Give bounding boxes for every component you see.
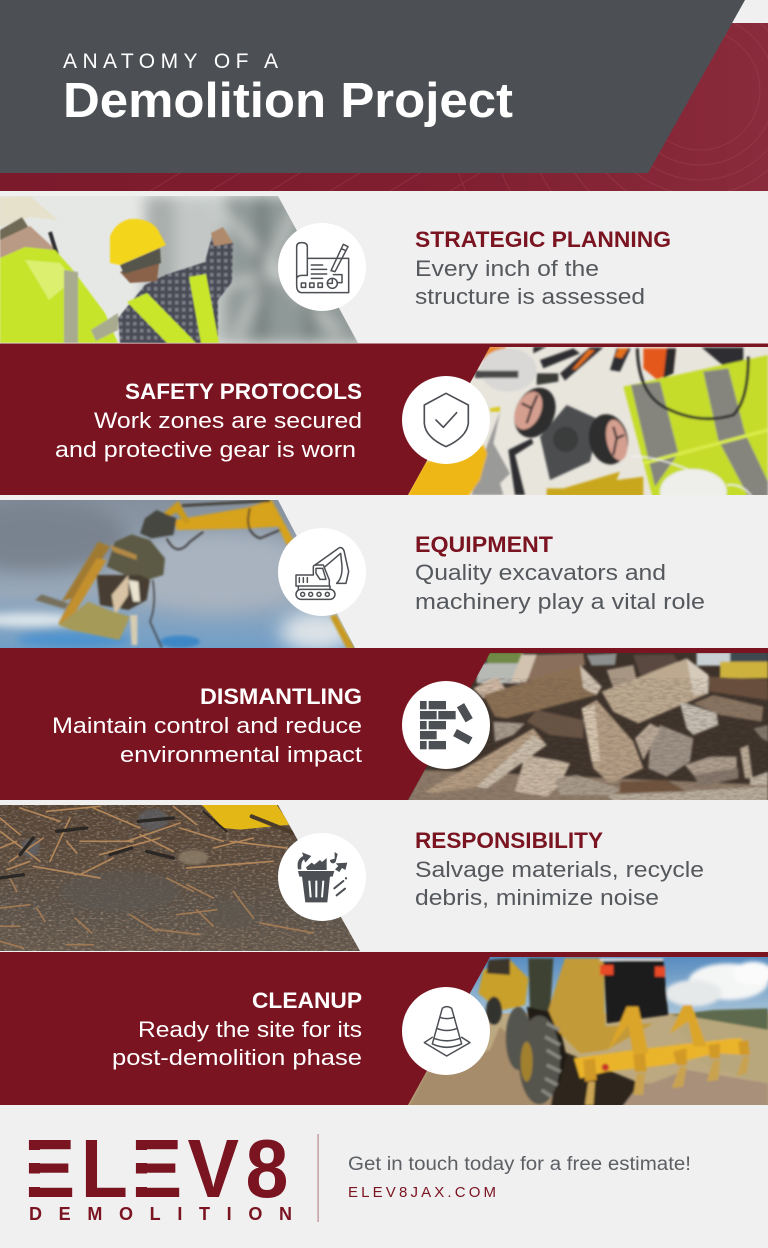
text: dismantling: Maintain control and reduce [52, 713, 362, 738]
text: dismantling [52, 684, 363, 767]
text: responsibility [415, 828, 704, 910]
tires [506, 1007, 531, 1070]
text: dismantling: environmental impact [120, 742, 363, 767]
photo: excavator arm and sky [0, 500, 355, 648]
header band: textured red [0, 23, 768, 191]
icon: blueprint and pencil [278, 223, 366, 311]
text: strategic planning: structure is assessed [415, 284, 645, 309]
title [63, 50, 513, 128]
text: strategic planning: STRATEGIC PLANNING [415, 227, 671, 252]
text: equipment: Quality excavators and [415, 560, 666, 585]
photo: wood debris [0, 805, 360, 951]
icon: shield with check [402, 376, 490, 464]
text: strategic planning [415, 227, 671, 309]
text: safety protocols: and protective gear is worn [55, 437, 356, 462]
section 1 panel: strategic planning [0, 196, 671, 344]
boom [175, 500, 293, 545]
text: responsibility: RESPONSIBILITY [415, 828, 603, 853]
title kicker: ANATOMY OF A [63, 50, 278, 73]
text: safety protocols: Work zones are secured [94, 408, 362, 433]
text: cleanup: post-demolition phase [112, 1045, 362, 1070]
section 4 band: dismantling [0, 645, 768, 805]
photo: protective gear [408, 347, 768, 495]
footer divider [318, 1134, 319, 1222]
photo: construction workers [0, 196, 365, 344]
icon: traffic cone [402, 987, 490, 1075]
worker left [0, 196, 58, 227]
text: dismantling: DISMANTLING [200, 684, 362, 709]
gloves and yellow hat [472, 412, 510, 495]
icon: excavator [278, 528, 366, 616]
respirator [540, 405, 600, 480]
header panel: dark slanted block [0, 0, 745, 173]
worker right [118, 232, 233, 343]
section 5 panel: responsibility [0, 798, 704, 958]
title main: Demolition Project [63, 74, 513, 128]
section 2 band: safety protocols [0, 344, 768, 495]
call to action [348, 1154, 691, 1201]
text: equipment [415, 532, 705, 614]
icon: recycling bin [278, 833, 366, 921]
text: safety protocols: SAFETY PROTOCOLS [125, 379, 362, 404]
text: responsibility: Salvage materials, recycle [415, 857, 704, 882]
section 6 band: cleanup [0, 950, 768, 1110]
call to action: Get in touch today for a free estimate! [348, 1154, 691, 1175]
distant machine [478, 960, 528, 1010]
ripper [574, 1038, 748, 1078]
safety glasses [547, 472, 643, 497]
grapple [140, 510, 177, 538]
text: cleanup [112, 988, 362, 1070]
text: equipment: machinery play a vital role [415, 589, 705, 614]
call to action: ELEV8JAX.COM [348, 1184, 496, 1201]
text: equipment: EQUIPMENT [415, 532, 554, 557]
vest [623, 355, 768, 500]
photo: yellow grader [400, 950, 768, 1110]
text: responsibility: debris, minimize noise [415, 885, 659, 910]
respirator white [658, 467, 729, 495]
photo: concrete rubble [408, 653, 768, 800]
logo: gaps that separate the E bars [25, 1150, 184, 1187]
text: cleanup: Ready the site for its [138, 1017, 362, 1042]
section 3 panel: equipment [0, 495, 705, 655]
text: cleanup: CLEANUP [252, 988, 362, 1013]
logo: Elev8 Demolition: DEMOLITION [29, 1204, 292, 1224]
footer [24, 1121, 691, 1224]
grader body [528, 958, 553, 1017]
icon: bricks [402, 681, 490, 769]
logo: Elev8 Demolition: ELEV8 [24, 1121, 288, 1215]
text: strategic planning: Every inch of the [415, 256, 599, 281]
text: safety protocols [55, 379, 362, 462]
